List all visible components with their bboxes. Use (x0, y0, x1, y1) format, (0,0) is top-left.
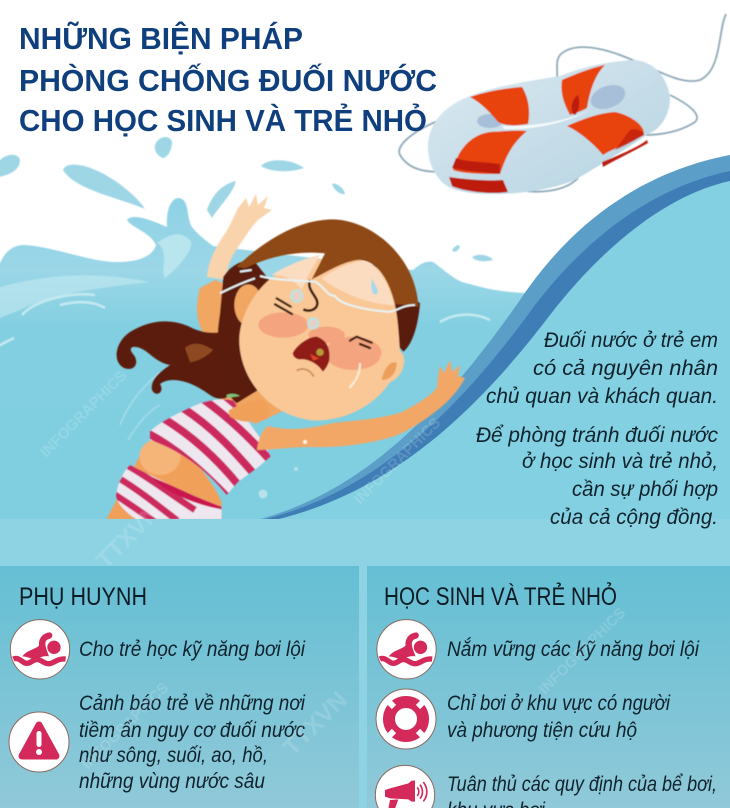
title: CHO HỌC SINH VÀ TRẺ NHỎ (19, 102, 427, 138)
suit trim (227, 394, 240, 398)
forehead left (272, 255, 320, 290)
heading: parents: PHỤ HUYNH (19, 583, 147, 611)
lifebuoy (399, 14, 726, 194)
panel: parents (0, 566, 359, 808)
watermarks (37, 367, 629, 773)
ear shade (382, 362, 397, 380)
under hair (217, 260, 280, 403)
item text: warning: những vùng nước sâu (79, 769, 265, 793)
face (239, 258, 400, 421)
watermarks: TTXVN (278, 687, 353, 761)
intro text: ở học sinh và trẻ nhỏ, (522, 449, 718, 473)
intro text: cần sự phối hợp (572, 477, 718, 501)
item text: warning: như sông, suối, ao, hồ, (79, 743, 268, 767)
left ear (234, 284, 262, 326)
item text: rescue: và phương tiện cứu hộ (447, 718, 637, 742)
tongue (310, 349, 324, 361)
red bands (453, 65, 644, 174)
title: NHỮNG BIỆN PHÁP (19, 20, 303, 56)
hair cap (237, 219, 418, 307)
rope (399, 14, 726, 192)
right ear (377, 350, 404, 383)
watermarks: INFOGRAPHICS (351, 414, 444, 508)
belly highlight (139, 438, 181, 475)
back shoulder (197, 280, 240, 344)
item text: rescue (447, 691, 671, 742)
right arm (257, 360, 465, 450)
ring body (428, 60, 670, 194)
swimsuit bottom (115, 464, 222, 519)
mouth (293, 337, 330, 372)
heading: students: HỌC SINH VÀ TRẺ NHỎ (384, 581, 617, 611)
swimsuit top (149, 398, 272, 496)
icon: megaphone (375, 765, 435, 808)
hair highlight (185, 344, 213, 362)
item text: rescue: Chỉ bơi ở khu vực có người (447, 691, 671, 715)
front shoulder (228, 400, 270, 422)
item text: warning: Cảnh báo trẻ về những nơi (79, 691, 306, 715)
neck (202, 350, 285, 424)
dark red shading (449, 95, 648, 193)
title (19, 20, 437, 138)
head (217, 219, 420, 421)
intro text: của cả cộng đồng. (550, 505, 718, 529)
highlight hole (502, 110, 590, 129)
small bubbles (258, 467, 298, 498)
eyes (275, 298, 372, 348)
raised arm (207, 194, 272, 280)
bubbles (291, 290, 318, 328)
item text: master swimming: Nắm vững các kỹ năng bơi lội (447, 636, 700, 661)
item text: warning (79, 691, 306, 793)
lower background band (0, 519, 730, 808)
blush (258, 312, 382, 370)
item text: warning: tiềm ẩn nguy cơ đuối nước (79, 718, 305, 742)
torso (106, 392, 272, 519)
splash droplets (0, 137, 493, 261)
intro text: có cả nguyên nhân (533, 356, 718, 380)
drop on forehead (371, 278, 378, 294)
forehead right (322, 261, 394, 305)
icon: swimmer (10, 620, 70, 679)
hair tail (117, 321, 245, 399)
intro text: Đuối nước ở trẻ em (544, 328, 718, 352)
watermarks: INFOGRAPHICS (37, 367, 130, 461)
elbow highlight (303, 440, 307, 444)
title: PHÒNG CHỐNG ĐUỐI NƯỚC (19, 62, 437, 98)
hole shadows (477, 81, 629, 128)
intro text (476, 328, 718, 529)
icon: warning (9, 712, 69, 772)
tear (350, 364, 360, 387)
icon: lifebuoy (376, 689, 436, 749)
lower skin (108, 502, 133, 519)
watermarks: INFOGRAPHICS (79, 679, 172, 773)
watermarks: TTXVN (91, 500, 166, 574)
panel: students and children (367, 566, 730, 808)
chin line (297, 369, 314, 377)
item text: swimming skills: Cho trẻ học kỹ năng bơi lội (79, 637, 306, 661)
swirl (303, 280, 317, 311)
intro text: Để phòng tránh đuối nước (476, 423, 718, 447)
item text: rules (447, 772, 717, 808)
water line (220, 270, 415, 312)
water scene (0, 198, 730, 535)
intro text: chủ quan và khách quan. (486, 384, 718, 408)
midriff skin (107, 438, 222, 519)
icon: swimmer (377, 620, 436, 679)
girl illustration (107, 194, 465, 523)
curved blue band (257, 155, 730, 520)
watermarks: INFOGRAPHICS (536, 604, 629, 698)
